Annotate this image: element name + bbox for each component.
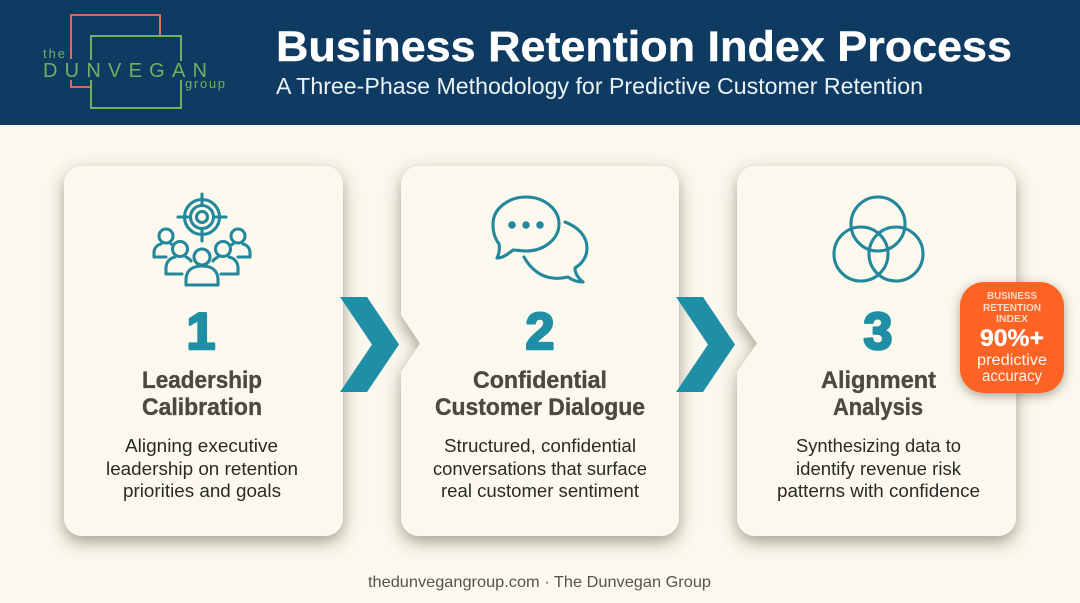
body text: identify revenue risk bbox=[796, 459, 962, 479]
number 3: 3 bbox=[864, 303, 892, 361]
heading: Analysis bbox=[833, 394, 923, 421]
title: Business Retention Index Process bbox=[276, 23, 1012, 71]
logo: the bbox=[43, 46, 65, 61]
body text: real customer sentiment bbox=[441, 481, 639, 501]
callout: 90%+ badge: accuracy bbox=[982, 368, 1042, 385]
icon: target and people bbox=[154, 194, 250, 285]
body text: conversations that surface bbox=[433, 459, 647, 479]
heading bbox=[821, 367, 936, 421]
heading bbox=[142, 367, 262, 421]
panel: step 3 bbox=[737, 166, 1016, 536]
heading: Alignment bbox=[821, 367, 936, 394]
body text: patterns with confidence bbox=[777, 481, 980, 501]
icon: speech bubbles bbox=[493, 197, 587, 282]
body text: priorities and goals bbox=[123, 481, 281, 501]
callout: 90%+ badge: predictive bbox=[977, 352, 1047, 369]
body text bbox=[433, 436, 647, 501]
body text bbox=[777, 436, 980, 501]
heading: Calibration bbox=[142, 394, 262, 421]
heading: Leadership bbox=[142, 367, 262, 394]
logo: DUNVEGAN bbox=[43, 60, 207, 82]
icon: overlapping circles bbox=[834, 197, 923, 281]
body text: Structured, confidential bbox=[444, 436, 636, 456]
header band bbox=[0, 0, 1080, 125]
heading bbox=[435, 367, 645, 421]
callout: 90%+ badge bbox=[960, 282, 1064, 393]
logo: group bbox=[185, 76, 225, 91]
arrow: step 2 to 3 bbox=[676, 297, 735, 392]
arrow: step 1 to 2 bbox=[340, 297, 399, 392]
body text: Synthesizing data to bbox=[796, 436, 961, 456]
logo bbox=[43, 15, 225, 108]
body text: leadership on retention bbox=[106, 459, 298, 479]
footer: thedunvegangroup.com · The Dunvegan Group bbox=[368, 574, 711, 591]
body text: Aligning executive bbox=[125, 436, 278, 456]
subtitle: A Three-Phase Methodology for Predictive Customer Retention bbox=[276, 73, 923, 99]
heading: Customer Dialogue bbox=[435, 394, 645, 421]
callout: 90%+ badge: INDEX bbox=[996, 314, 1028, 325]
body text bbox=[106, 436, 298, 501]
callout: 90%+ badge: RETENTION bbox=[983, 303, 1041, 314]
number 2: 2 bbox=[526, 303, 554, 361]
number 1: 1 bbox=[187, 303, 215, 361]
panel: step 1 bbox=[64, 166, 343, 536]
heading: Confidential bbox=[473, 367, 607, 394]
callout: 90%+ badge: 90%+ bbox=[980, 325, 1044, 352]
panel: step 2 bbox=[401, 166, 679, 536]
callout: 90%+ badge: BUSINESS bbox=[987, 291, 1037, 302]
